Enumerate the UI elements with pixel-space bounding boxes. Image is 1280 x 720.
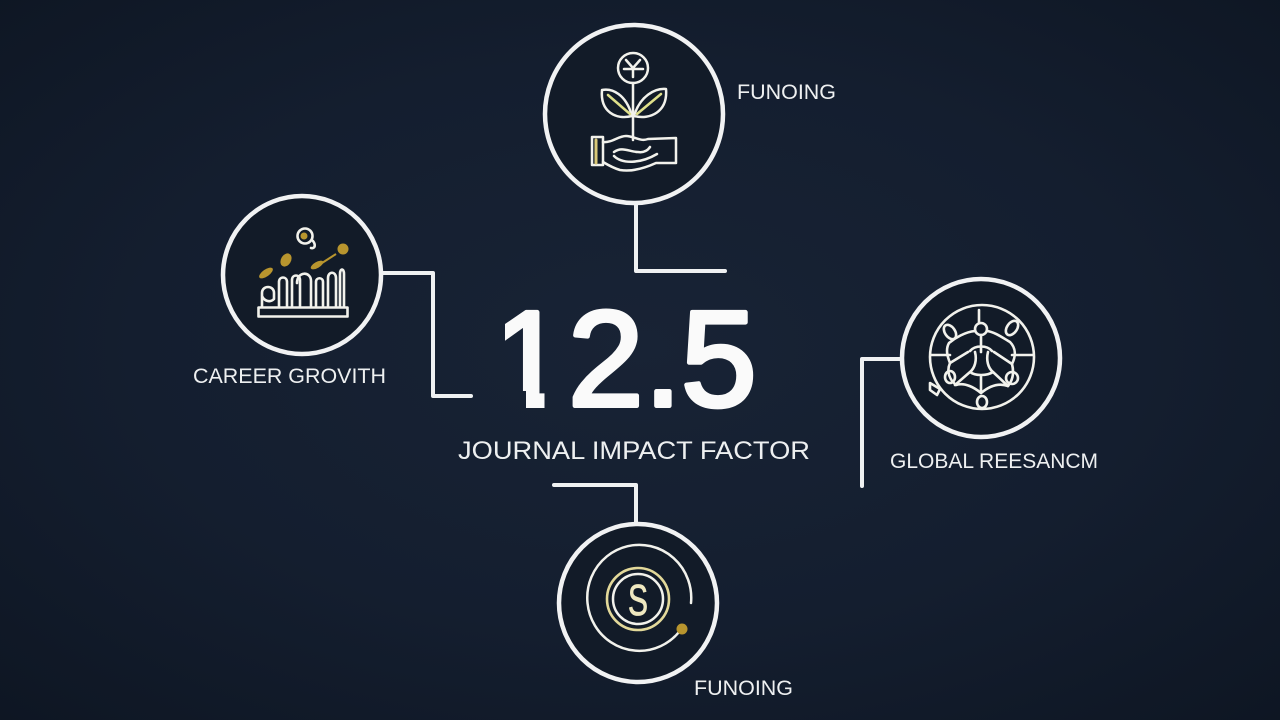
icon: coin with orbit <box>587 545 691 651</box>
coin outer ring <box>607 568 669 630</box>
right node ring <box>902 279 1060 437</box>
light bulb coin <box>298 228 315 248</box>
left node ring <box>223 196 381 354</box>
panel: top funding node <box>545 25 836 203</box>
gold coin trail <box>257 244 348 280</box>
icon: rising bar chart with gold coins <box>257 228 348 316</box>
top node ring <box>545 25 723 203</box>
panel: bottom funding node <box>559 524 793 700</box>
label: global research: GLOBAL REESANCM <box>890 450 1098 473</box>
orbit gold dot <box>676 624 688 634</box>
label: top funding: FUNOING <box>737 81 836 104</box>
icon: network inside a globe <box>930 305 1034 409</box>
label: bottom funding: FUNOING <box>694 677 793 700</box>
connector: left circle to centre <box>383 273 471 396</box>
bottom node ring <box>559 524 717 682</box>
connector: top circle to centre <box>636 205 725 271</box>
coin symbol: S <box>628 576 648 625</box>
icon: plant growing from a hand <box>592 53 676 171</box>
infographic canvas <box>194 22 1096 695</box>
coin inner ring <box>613 574 663 624</box>
panel: global research node <box>890 279 1098 473</box>
label: career growth: CAREER GROVITH <box>193 365 386 388</box>
connector: bottom circle to centre <box>554 485 636 523</box>
headline metric: 12.5 <box>491 283 757 435</box>
orbit arc <box>587 545 691 651</box>
panel: career growth node <box>193 196 386 388</box>
metric caption: JOURNAL IMPACT FACTOR <box>458 437 810 465</box>
bars and base <box>258 270 348 316</box>
connector: right circle to centre <box>862 359 900 486</box>
